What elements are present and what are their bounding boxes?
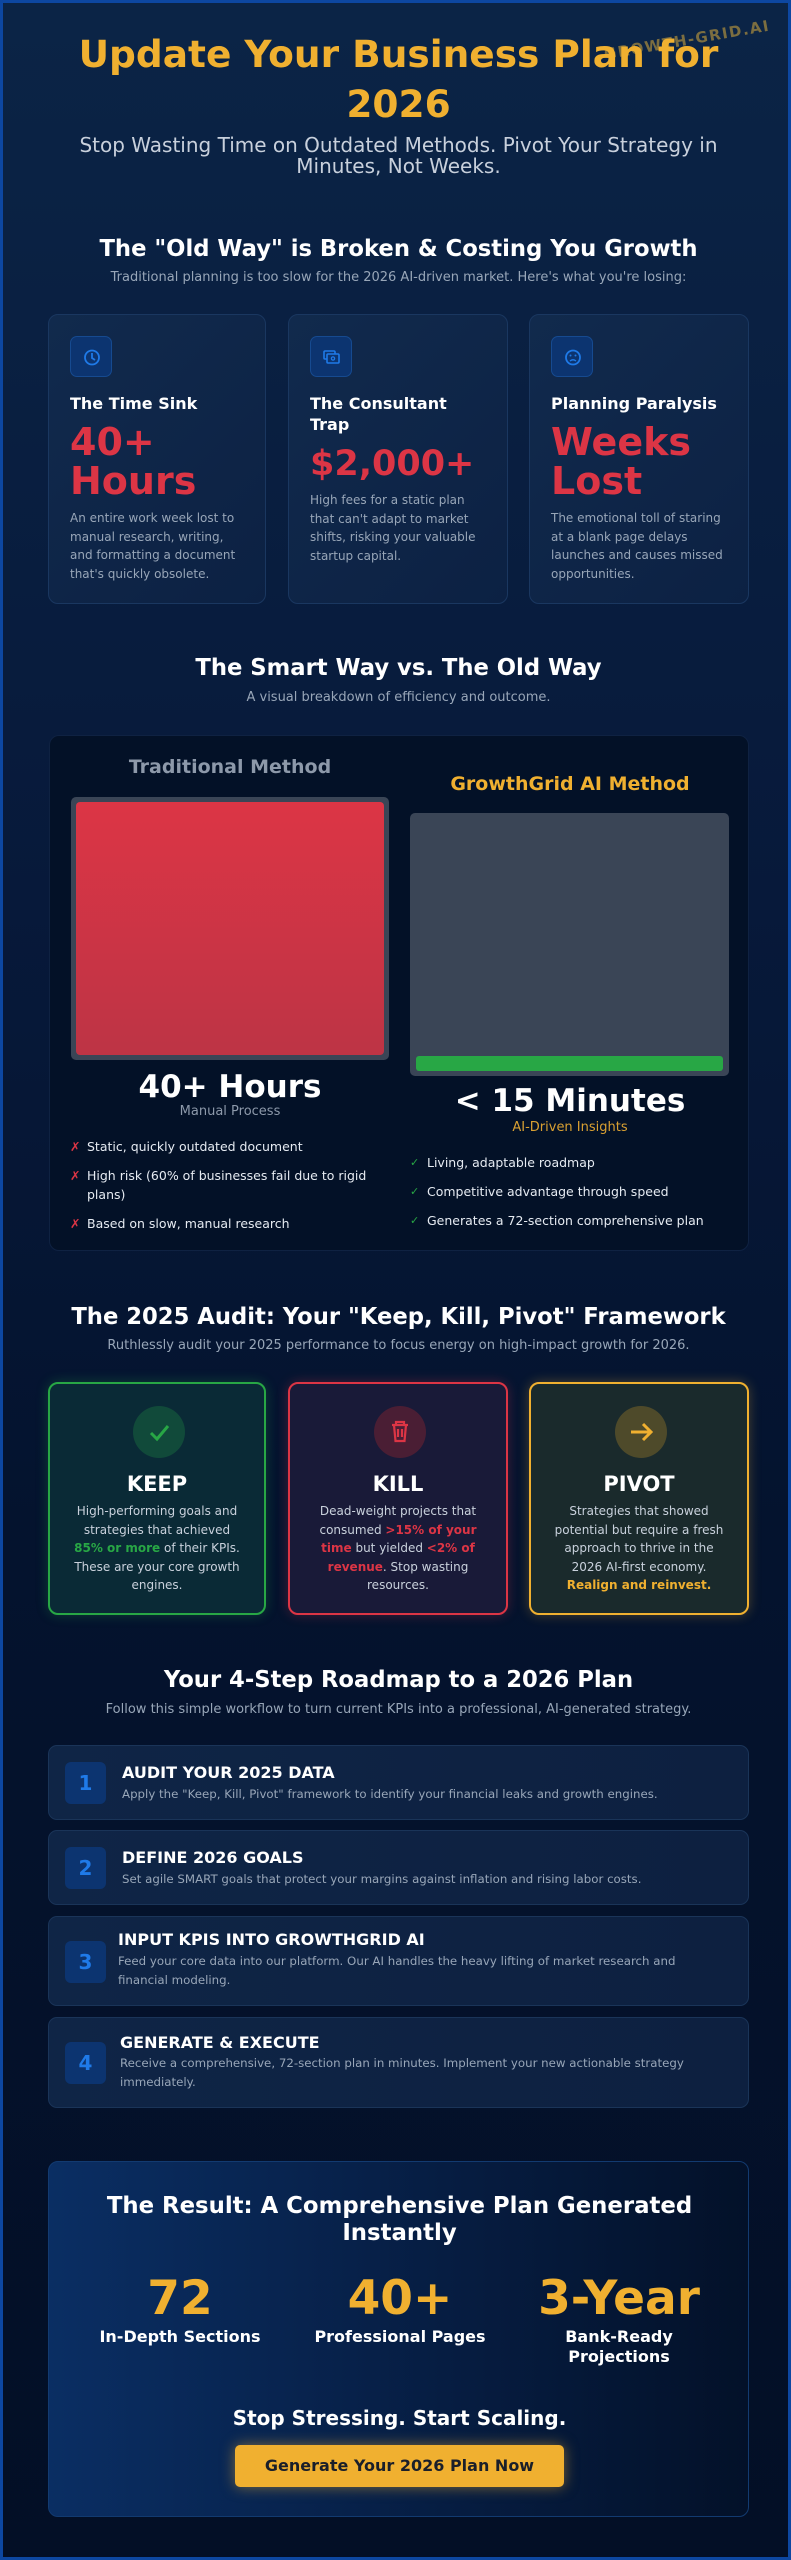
result title: Instantly	[342, 2220, 457, 2246]
label: ai-driven: AI-Driven Insights	[512, 1120, 628, 1135]
icon: arrow	[615, 1406, 667, 1458]
description: The emotional toll of staring at a blank page delays launches and causes missed opportunities.	[551, 511, 723, 581]
subheading: roadmap: Follow this simple workflow to turn current KPIs into a professional, AI-generated strategy.	[106, 1702, 691, 1717]
title: Update Your Business Plan for	[79, 32, 718, 76]
panel: time sink	[48, 314, 266, 604]
heading: roadmap: Your 4-Step Roadmap to a 2026 Plan	[164, 1667, 633, 1693]
label: manual process: Manual Process	[180, 1104, 280, 1119]
icon: money	[310, 336, 352, 377]
heading: smart way: The Smart Way vs. The Old Way	[195, 655, 602, 681]
stat: Weeks	[551, 420, 691, 464]
pivot text: 2026 AI-first economy.	[572, 1560, 706, 1574]
step 2: DEFINE 2026 GOALS	[122, 1848, 304, 1867]
title	[79, 32, 718, 126]
stat: Lost	[551, 459, 642, 503]
step 3	[48, 1916, 749, 2006]
panel: planning paralysis	[529, 314, 749, 604]
result title: The Result: A Comprehensive Plan Generated	[107, 2193, 692, 2219]
title: 2026	[346, 82, 451, 126]
description: An entire work week lost to manual research, writing, and formatting a document that's quickly obsolete.	[70, 511, 235, 581]
step 2: Set agile SMART goals that protect your margins against inflation and rising labor costs.	[122, 1872, 641, 1886]
stat: 3-year: 3-Year	[538, 2271, 700, 2326]
step 1: AUDIT YOUR 2025 DATA	[122, 1763, 335, 1782]
stat: 40+	[314, 2271, 486, 2346]
description: High fees for a static plan that can't adapt to market shifts, risking your valuable startup capital.	[310, 493, 476, 563]
step 1: 1	[79, 1771, 92, 1795]
stat	[70, 420, 196, 503]
list: ai benefits	[410, 1155, 704, 1228]
subheading: audit: Ruthlessly audit your 2025 performance to focus energy on high-impact growth for 2026.	[107, 1338, 690, 1353]
icon: trash	[374, 1406, 426, 1458]
icon: sad face	[551, 336, 593, 377]
step 3: INPUT KPIS INTO GROWTHGRID AI	[118, 1930, 425, 1949]
step 4: GENERATE & EXECUTE	[120, 2033, 320, 2052]
card title: Trap	[310, 415, 349, 434]
pivot text	[555, 1504, 723, 1592]
list: ai benefits: ✓	[410, 1214, 419, 1227]
subtitle: Stop Wasting Time on Outdated Methods. Pivot Your Strategy in	[79, 133, 718, 157]
pivot text: Strategies that showed potential but require a fresh approach to thrive in the	[555, 1504, 723, 1555]
step 4: Receive a comprehensive, 72-section plan in minutes. Implement your new actionable strategy immediately.	[120, 2056, 684, 2088]
bar: growthgrid	[410, 813, 729, 1076]
subtitle: Minutes, Not Weeks.	[296, 154, 501, 178]
step 3: Feed your core data into our platform. Our AI handles the heavy lifting of market research and financial modeling.	[118, 1954, 675, 1986]
step 4	[48, 2017, 749, 2108]
step 2	[48, 1830, 749, 1905]
stat: 72	[99, 2271, 261, 2346]
subheading: smart way: A visual breakdown of efficiency and outcome.	[246, 690, 551, 705]
list: traditional drawbacks: High risk (60% of businesses fail due to rigid plans)	[87, 1168, 366, 1202]
list: traditional drawbacks: Static, quickly outdated document	[87, 1139, 303, 1154]
watermark: GROWTH-GRID.AI	[603, 17, 771, 63]
card title: The Consultant	[310, 394, 447, 413]
stat: 3-year: Projections	[568, 2347, 670, 2366]
icon: clock	[70, 336, 112, 377]
panel: result	[48, 2161, 749, 2517]
list: ai benefits: Living, adaptable roadmap	[427, 1155, 595, 1170]
button: cta: Generate Your 2026 Plan Now	[265, 2456, 534, 2475]
subheading: old way: Traditional planning is too slow for the 2026 AI-driven market. Here's what you're losing:	[111, 270, 686, 285]
stat	[551, 420, 691, 503]
keep text: High-performing goals and strategies that achieved 85% or more of their KPIs. These are your core growth engines.	[74, 1504, 240, 1592]
stat: 40+	[70, 420, 155, 464]
pivot title: PIVOT	[603, 1472, 675, 1496]
list: ai benefits: Generates a 72-section comprehensive plan	[427, 1213, 704, 1228]
label: growthgrid: GrowthGrid AI Method	[450, 773, 690, 795]
list: ai benefits: Competitive advantage through speed	[427, 1184, 669, 1199]
pivot text: Realign and reinvest.	[567, 1578, 711, 1592]
stat: 40+: Professional Pages	[314, 2327, 486, 2346]
list: traditional drawbacks: ✗	[70, 1139, 80, 1154]
result title	[106, 2193, 692, 2246]
card title: The Time Sink	[70, 394, 197, 413]
stat: 40+ hours: 40+ Hours	[139, 1069, 321, 1105]
step 3: 3	[79, 1950, 92, 1974]
keep title: KEEP	[127, 1472, 187, 1496]
label: traditional: Traditional Method	[129, 756, 331, 778]
step 1	[48, 1745, 749, 1820]
panel: kill	[288, 1382, 508, 1615]
card title: Planning Paralysis	[551, 394, 717, 413]
stat: 72: 72	[147, 2271, 213, 2326]
list: traditional drawbacks: ✗	[70, 1216, 80, 1231]
panel: keep	[48, 1382, 266, 1615]
stat: 15 minutes: < 15 Minutes	[455, 1083, 685, 1119]
kill text: Dead-weight projects that consumed >15% of your time but yielded <2% of revenue. Stop wasting resources.	[319, 1504, 477, 1592]
panel: comparison	[49, 735, 749, 1251]
list: traditional drawbacks: ✗	[70, 1168, 80, 1183]
step 2: 2	[79, 1856, 92, 1880]
stat: 3-year: Bank-Ready	[565, 2327, 673, 2346]
heading: old way: The "Old Way" is Broken & Costing You Growth	[99, 236, 698, 262]
kill title: KILL	[373, 1472, 423, 1496]
card title	[310, 394, 447, 434]
list: ai benefits: ✓	[410, 1185, 419, 1198]
icon: check	[133, 1406, 185, 1458]
list: ai benefits: ✓	[410, 1156, 419, 1169]
stat: $2,000+	[310, 444, 474, 484]
step 1: Apply the "Keep, Kill, Pivot" framework to identify your financial leaks and growth engines.	[122, 1787, 658, 1801]
stat: 3-year	[538, 2271, 700, 2366]
step 4: 4	[79, 2051, 92, 2075]
heading: audit: The 2025 Audit: Your "Keep, Kill, Pivot" Framework	[71, 1304, 726, 1330]
subtitle	[79, 133, 718, 178]
stat: 72: In-Depth Sections	[99, 2327, 261, 2346]
list: traditional drawbacks	[70, 1139, 366, 1231]
bar: traditional	[71, 797, 389, 1060]
tagline: Stop Stressing. Start Scaling.	[233, 2406, 566, 2430]
panel: consultant trap	[288, 314, 508, 604]
list: traditional drawbacks: Based on slow, manual research	[87, 1216, 290, 1231]
panel: pivot	[529, 1382, 749, 1615]
stat: Hours	[70, 459, 196, 503]
button: cta	[235, 2445, 564, 2487]
stat: 40+: 40+	[348, 2271, 452, 2326]
